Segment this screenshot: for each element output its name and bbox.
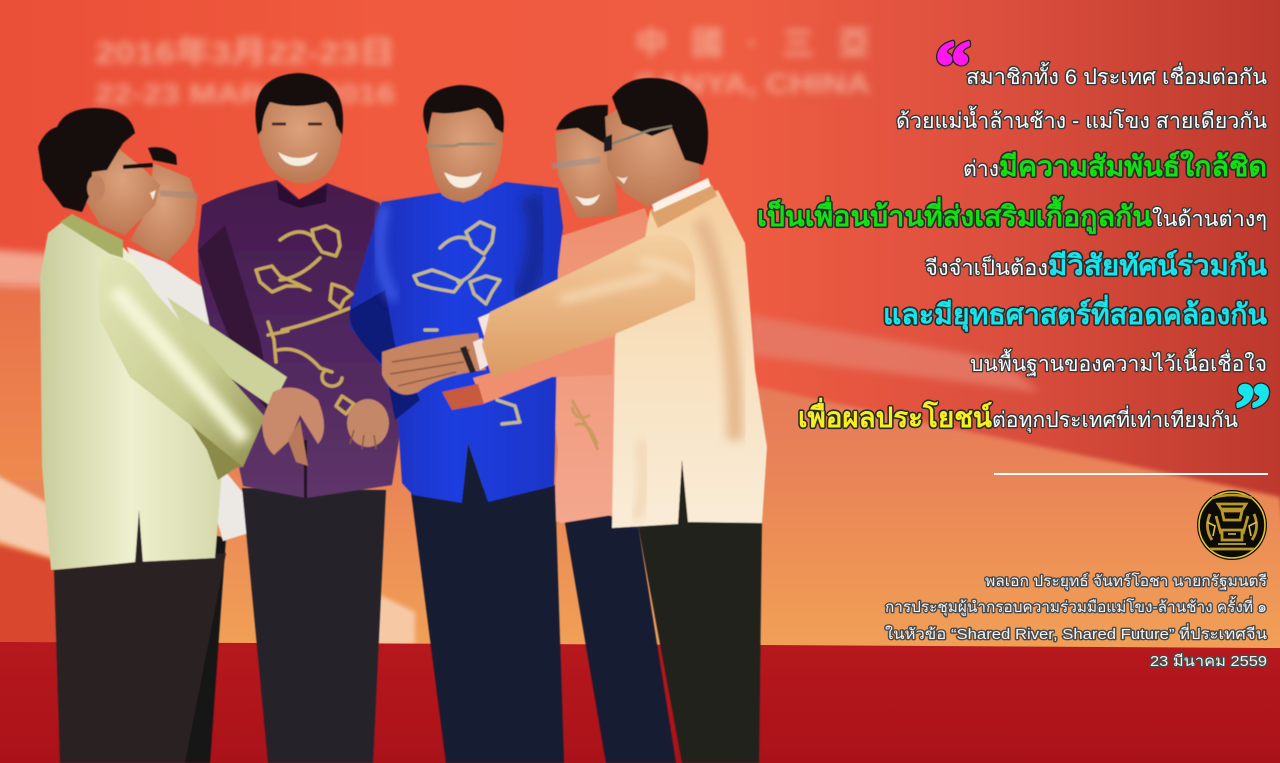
person: blue jacket <box>349 85 564 763</box>
line 5: จีงจำเป็นต้อง <box>925 254 1048 280</box>
event name: การประชุมผู้นำกรอบความร่วมมือแม่โขง-ล้านช้าง ครั้งที่ ๑ <box>885 596 1267 617</box>
line 6: และมียุทธศาสตร์ที่สอดคล้องกัน <box>883 294 1267 332</box>
floor: red carpet <box>0 642 1280 763</box>
line 4: ในด้านต่างๆ <box>1152 207 1267 231</box>
line 4: เป็นเพื่อนบ้านที่ส่งเสริมเกื้อกูลกัน <box>757 195 1152 234</box>
hands: clasped at left <box>262 388 324 455</box>
embroidery: gold floral pattern <box>256 226 354 414</box>
line 5: มีวิสัยทัศน์ร่วมกัน <box>1048 250 1267 281</box>
speaker name: พลเอก ประยุทธ์ จันทร์โอชา นายกรัฐมนตรี <box>985 572 1267 591</box>
photo: six leaders joining hands <box>38 73 767 763</box>
divider <box>994 473 1268 475</box>
icon: Thai government emblem <box>1197 490 1267 560</box>
line 3: มีความสัมพันธ์ใกล้ชิด <box>999 150 1267 182</box>
person: salmon jacket <box>550 105 676 763</box>
line 8: เพื่อผลประโยชน์ <box>798 397 992 433</box>
blurred banner text: location <box>635 25 870 99</box>
line 5 <box>925 250 1267 281</box>
closing quote mark: ” <box>1235 369 1271 449</box>
person: peach jacket, front right <box>382 78 767 763</box>
joined hands and wristwatch <box>382 312 498 395</box>
opening quote mark: “ <box>935 26 971 106</box>
person: green jacket <box>38 108 324 763</box>
person: purple jacket <box>198 73 402 763</box>
line 8: ต่อทุกประเทศที่เท่าเทียมกัน <box>992 405 1238 433</box>
blurred banner text: date: 2016年3月22-23日 <box>95 35 395 70</box>
person: white shirt, rear left <box>127 147 249 763</box>
opening quote mark: “ <box>935 26 971 106</box>
line 8 <box>798 397 1238 433</box>
quote panel <box>757 26 1271 449</box>
theme: ในหัวข้อ “Shared River, Shared Future” ที่ประเทศจีน <box>885 623 1267 643</box>
salmon sleeve under peach arm <box>473 337 615 404</box>
date: 23 มีนาคม 2559 <box>1150 653 1267 670</box>
line 3: ต่าง <box>963 158 999 181</box>
attribution block <box>885 572 1267 670</box>
blurred banner text: date: 22-23 MARCH 2016 <box>95 79 395 109</box>
blurred banner text: location: SANYA, CHINA <box>635 68 870 99</box>
closing quote mark: ” <box>1235 369 1271 449</box>
line 4 <box>757 195 1267 234</box>
line 2: ด้วยแม่น้ำล้านช้าง - แม่โขง สายเดียวกัน <box>896 106 1267 133</box>
line 1: สมาชิกทั้ง 6 ประเทศ เชื่อมต่อกัน <box>966 62 1267 89</box>
peach arm <box>482 234 695 378</box>
blurred banner text: location: 中 國 · 三 亞 <box>635 25 870 61</box>
line 7: บนพื้นฐานของความไว้เนื้อเชื่อใจ <box>970 349 1267 376</box>
blurred banner text: date <box>95 35 395 109</box>
embroidery: pale floral pattern <box>414 222 520 424</box>
